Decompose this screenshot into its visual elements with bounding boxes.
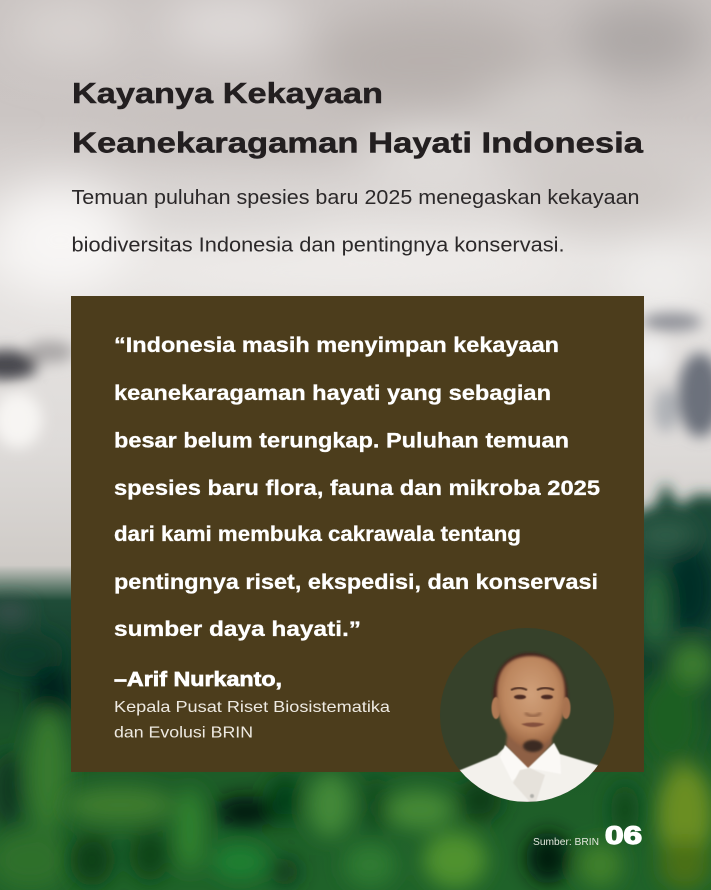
mouth [521,722,545,727]
nose [525,713,541,716]
page number: 06 [605,822,642,850]
title: Kayanya Kekayaan [72,78,383,110]
portrait: Arif Nurkanto [440,628,614,802]
quote text: “Indonesia masih menyimpan kekayaan [114,333,559,357]
source note: Sumber: BRIN [533,836,599,848]
eyes [514,695,526,699]
panel: quote [71,296,644,772]
title [72,78,644,160]
neck [504,732,554,768]
subtitle: biodiversitas Indonesia dan pentingnya konservasi. [72,234,564,256]
shirt [458,743,600,802]
attribution role: dan Evolusi BRIN [114,724,253,742]
attribution role [114,699,390,742]
right treeline [644,476,711,598]
eyebrows [511,688,527,690]
title: Keanekaragaman Hayati Indonesia [72,128,644,160]
subtitle [72,187,640,256]
portrait background [440,628,614,802]
quote text [114,333,600,641]
face [497,656,565,747]
forest [0,519,711,890]
hair [492,652,568,700]
quote text: pentingnya riset, ekspedisi, dan konservasi [114,570,598,594]
ears [492,697,500,719]
quote text: sumber daya hayati.” [114,617,361,641]
subtitle: Temuan puluhan spesies baru 2025 menegaskan kekayaan [72,187,640,209]
attribution role: Kepala Pusat Riset Biosistematika [114,699,390,716]
quote text: spesies baru flora, fauna dan mikroba 2025 [114,476,600,500]
quote text: besar belum terungkap. Puluhan temuan [114,428,569,452]
attribution name: –Arif Nurkanto, [114,668,282,691]
quote text: dari kami membuka cakrawala tentang [114,522,521,546]
goatee [523,740,543,752]
quote text: keanekaragaman hayati yang sebagian [114,381,551,405]
